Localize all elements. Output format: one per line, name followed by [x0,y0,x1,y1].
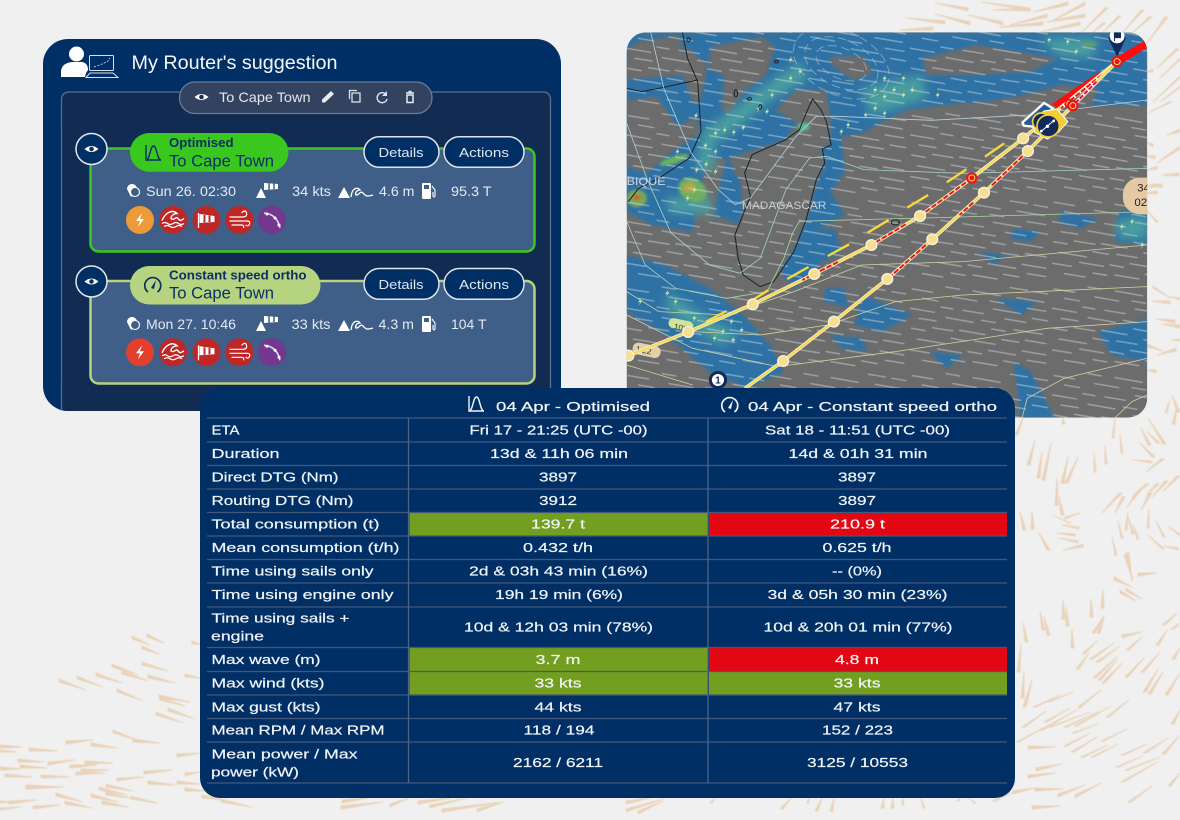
visibility toggle [76,266,107,297]
map labels: BIQUE [627,176,666,188]
row labels: Direct DTG (Nm) [212,470,338,484]
optimised values: Fri 17 - 21:25 (UTC -00) [470,422,648,438]
row labels: Total consumption (t) [212,516,380,532]
alert icons [126,206,286,234]
row labels: Mean RPM / Max RPM [212,722,384,738]
route stats: 104 T [451,316,487,332]
route stats: Mon 27. 10:46 [146,316,236,332]
route stats [127,316,487,332]
row labels: Duration [212,446,280,461]
route: optimised [628,62,1117,356]
icon: destination pin [1108,32,1126,56]
row labels: engine [211,628,264,644]
optimised values: 13d & 11h 06 min [490,446,628,461]
visibility toggle [76,134,107,164]
row labels: Mean consumption (t/h) [212,540,400,555]
details button: Details [378,278,424,292]
optimised values: 3.7 m [536,652,580,667]
optimised values [464,422,653,770]
time bubbles: 34 [1137,183,1151,195]
route stats: 4.6 m [379,183,414,199]
header: constant speed ortho: 04 Apr - Constant speed ortho [748,399,997,414]
route stats: 33 kts [292,316,330,332]
route stats: 34 kts [292,183,331,199]
time bubbles: 10' [673,322,686,333]
isobars [627,32,1147,418]
actions button: Actions [459,278,509,292]
details button: Details [378,146,424,160]
alert icons [126,338,286,366]
constant speed values: 14d & 01h 31 min [788,446,928,461]
row labels [211,422,400,780]
optimised values: 19h 19 min (6%) [495,587,623,602]
constant speed values: -- (0%) [832,564,882,578]
optimised values: 3897 [539,470,577,484]
header: constant speed ortho [722,398,997,414]
rain patches [627,43,1097,207]
row labels: Max wind (kts) [212,676,324,690]
optimised values: 0.432 t/h [523,540,593,555]
constant speed values: Sat 18 - 11:51 (UTC -00) [765,422,950,438]
constant speed values: 3897 [838,493,876,508]
card: Optimised route [76,133,534,252]
actions button: Actions [459,146,509,160]
optimised values: 2162 / 6211 [513,755,603,770]
time bubbles [631,178,1163,359]
route stats: 95.3 T [451,183,492,199]
optimised values: 139.7 t [531,516,586,532]
wind gust symbols [638,36,1144,344]
route name pill: To Cape Town [169,152,274,170]
panel: My Router's suggestion [43,39,561,422]
header: optimised [469,396,650,414]
row labels: Max wave (m) [212,652,320,667]
route stats [127,183,492,199]
wind swirl [792,32,890,100]
optimised values: 2d & 03h 43 min (16%) [469,564,648,578]
route name pill: Constant speed ortho [169,268,307,282]
icon: boat position [1022,103,1068,139]
map: weather routing [623,14,1163,418]
route name pill [130,266,320,304]
constant speed values: 3125 / 10553 [807,755,908,770]
constant speed values: 33 kts [834,676,881,690]
actions button [444,268,524,299]
constant speed values [764,422,952,770]
route name pill [130,133,288,172]
row labels: Max gust (kts) [212,700,320,714]
constant speed values: 3d & 05h 30 min (23%) [768,587,948,602]
dashed yellow weather track [706,143,1004,322]
optimised values: 118 / 194 [524,722,594,738]
red forecast section [1052,41,1147,108]
route stats: Sun 26. 02:30 [146,183,236,199]
title: My Router's suggestion [132,53,338,74]
waypoint badge 1: 1 [715,376,721,387]
row labels: power (kW) [211,764,299,780]
constant speed values: 210.9 t [830,516,886,532]
icon: router person with laptop [61,46,118,78]
constant speed values: 4.8 m [835,652,879,667]
header: optimised: 04 Apr - Optimised [496,399,650,414]
row labels: Routing DTG (Nm) [212,493,354,508]
optimised values: 10d & 12h 03 min (78%) [464,620,653,634]
route stats: 4.3 m [378,316,414,332]
route: constant speed ortho [745,62,1117,388]
teal glows [666,38,1147,345]
details button [364,268,439,299]
constant speed values: 10d & 20h 01 min (77%) [764,620,952,634]
optimised values: 33 kts [534,676,582,690]
wind streaks [627,32,1147,418]
comparison table [200,388,1015,798]
route name pill: Optimised [169,136,234,150]
time bubbles: 1 22 [635,344,653,357]
time bubbles: 02 [1134,197,1147,209]
row labels: Time using sails + [212,610,350,626]
constant speed values: 0.625 t/h [822,540,892,555]
row labels: Time using sails only [212,564,374,578]
highlighted green and red cells [410,512,1007,695]
details button [364,137,439,167]
row labels: Time using engine only [212,587,394,602]
route name pill: To Cape Town [169,284,274,302]
optimised values: 44 kts [534,700,582,714]
row labels: Mean power / Max [212,746,358,762]
optimised values: 3912 [539,493,577,508]
ocean colour zones [627,32,1147,418]
waypoint badge 1 [709,371,727,389]
card: Constant speed ortho route [76,266,534,384]
gray land and cloud patches [627,35,1098,285]
route waypoints [623,133,1033,366]
constant speed values: 47 kts [834,700,881,714]
map labels: MADAGASCAR [742,200,826,212]
constant speed values: 3897 [838,470,876,484]
coastlines [627,32,899,287]
red waypoints [966,56,1123,184]
route group toolbar [180,82,432,114]
route group toolbar: To Cape Town [219,89,310,105]
row labels: ETA [212,422,240,438]
panel: route group [62,92,550,422]
actions button [444,137,524,167]
constant speed values: 152 / 223 [822,722,893,738]
map labels [628,178,826,209]
